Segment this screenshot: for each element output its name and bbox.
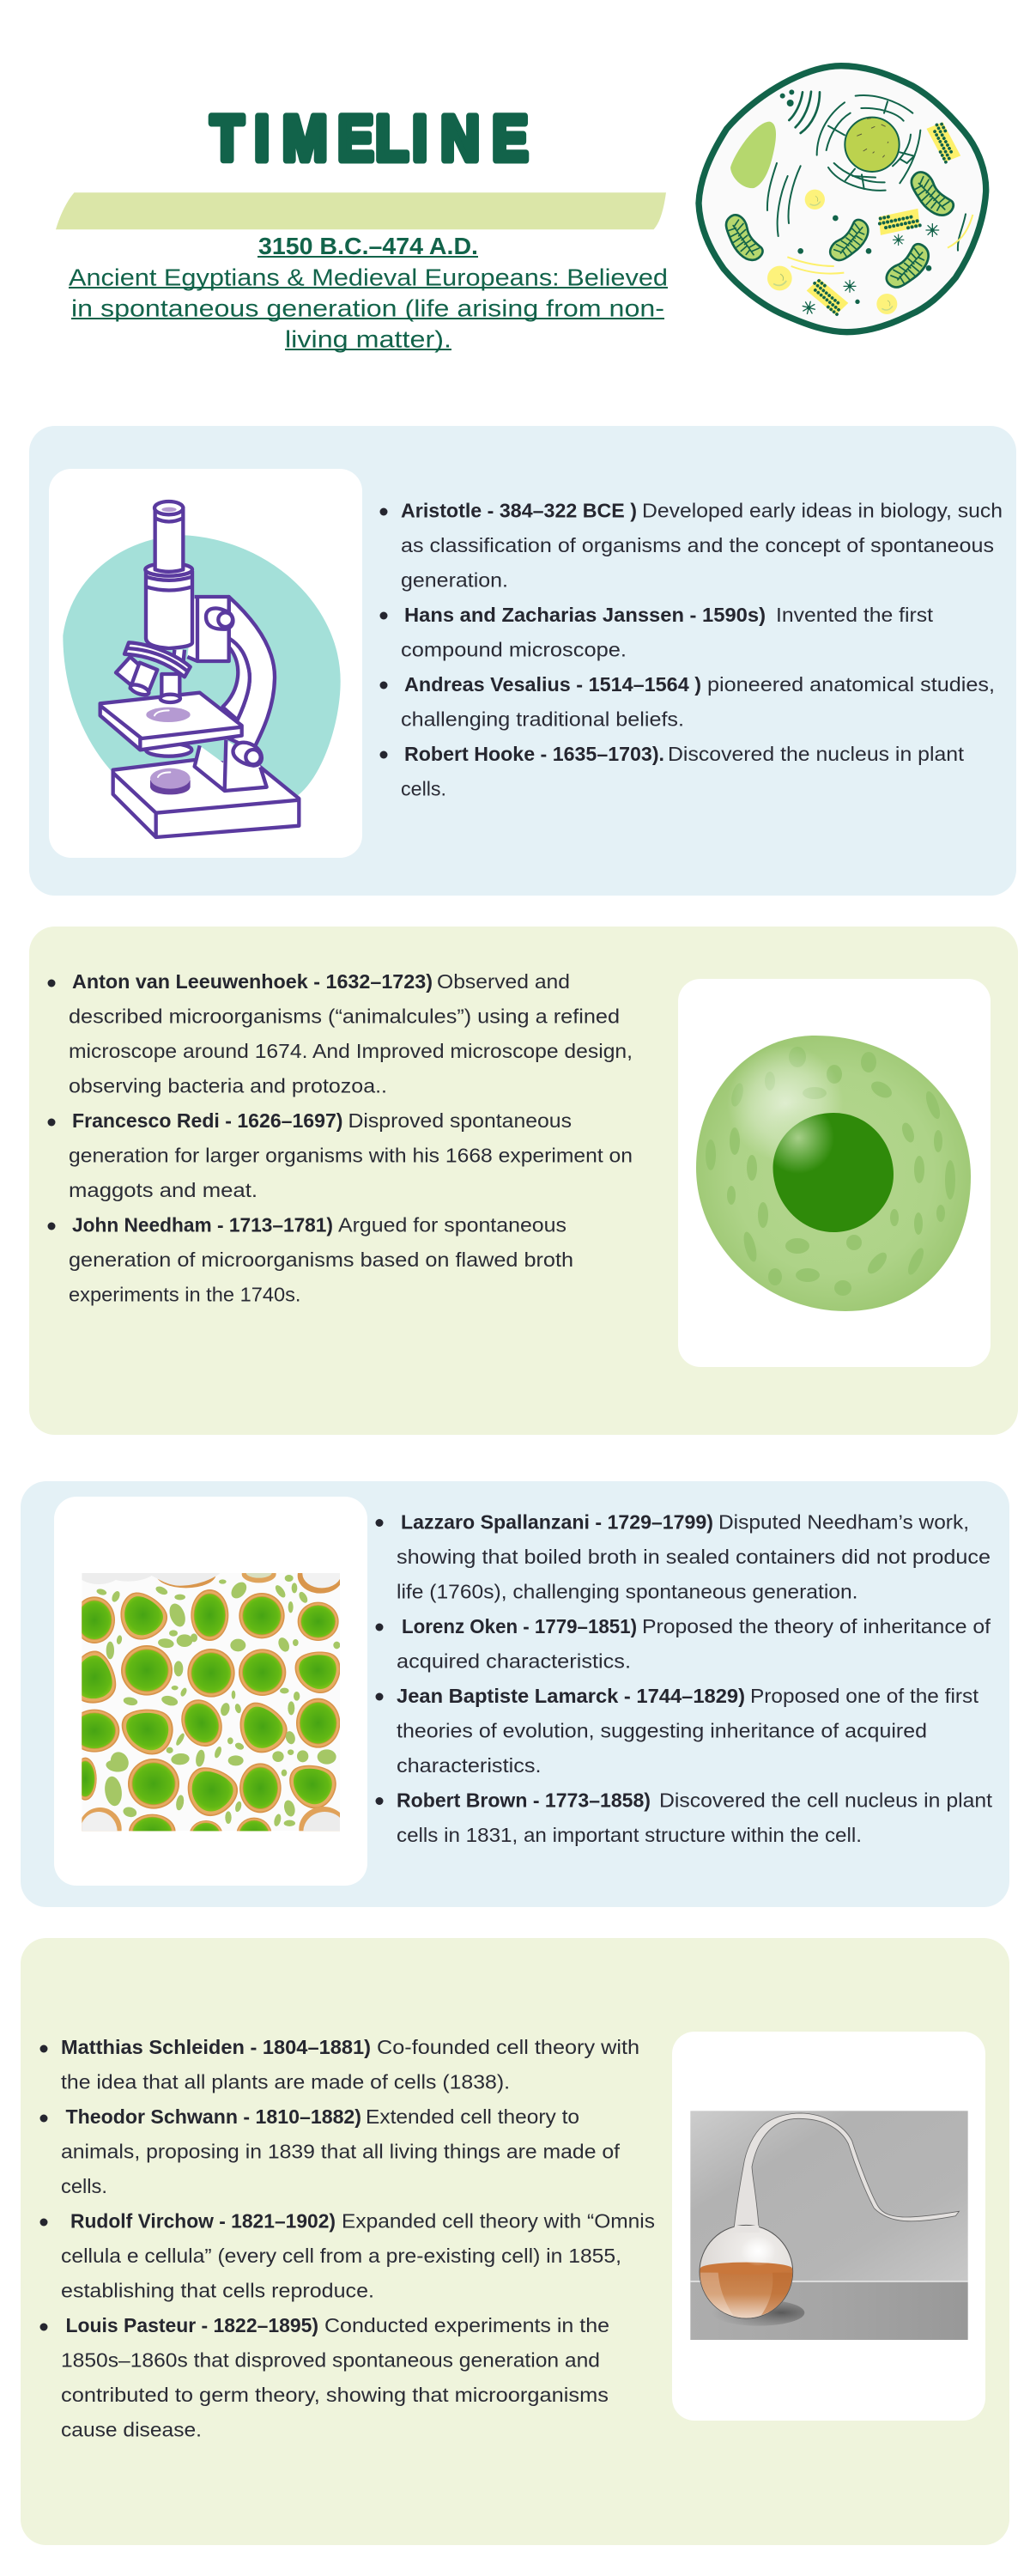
- icon: plant cell diagram: [699, 66, 986, 332]
- text block: cell theory founders: Matthias Schleiden - 1804–1881): [61, 2036, 371, 2058]
- text block: cell theory founders: cells.: [61, 2175, 107, 2197]
- text block: early scientists: [379, 500, 1003, 800]
- text block: inheritance theories: Discovered the cell nucleus in plant: [659, 1789, 992, 1812]
- text block: inheritance theories: [376, 1511, 992, 1846]
- image card: swan-neck flask: [672, 2032, 985, 2421]
- text block: cell theory founders: animals, proposing in 1839 that all living things are made of: [61, 2140, 620, 2162]
- image card: green cell: [678, 979, 991, 1367]
- text block: early scientists: Invented the first: [776, 604, 933, 626]
- text block: microscopists and spontaneous generation: generation of microorganisms based on flawed broth: [69, 1249, 573, 1271]
- illustration: plant cell pattern: [82, 1573, 340, 1831]
- text block: early scientists: Andreas Vesalius - 1514–1564 ): [404, 673, 701, 696]
- text block: microscopists and spontaneous generation: generation for larger organisms with his 1668 experiment on: [69, 1144, 633, 1166]
- intro text block: Ancient Egyptians & Medieval Europeans: Believed: [69, 264, 668, 290]
- intro text block: in spontaneous generation (life arising from non-: [71, 295, 664, 321]
- text block: early scientists: challenging traditional beliefs.: [401, 708, 684, 730]
- text block: inheritance theories: Jean Baptiste Lamarck - 1744–1829): [397, 1685, 745, 1707]
- text block: cell theory founders: Expanded cell theory with “Omnis: [342, 2210, 655, 2233]
- text block: microscopists and spontaneous generation: Anton van Leeuwenhoek - 1632–1723): [72, 970, 433, 993]
- text block: inheritance theories: life (1760s), challenging spontaneous generation.: [397, 1580, 858, 1602]
- text block: cell theory founders: Co-founded cell theory with: [377, 2036, 639, 2058]
- text block: cell theory founders: [39, 2036, 655, 2440]
- text block: microscopists and spontaneous generation: Disproved spontaneous: [348, 1109, 572, 1132]
- text block: inheritance theories: acquired characteristics.: [397, 1650, 631, 1673]
- text block: cell theory founders: contributed to germ theory, showing that microorganisms: [61, 2384, 609, 2406]
- text block: inheritance theories: Robert Brown - 1773–1858): [397, 1789, 651, 1812]
- text block: cell theory founders: cellula e cellula” (every cell from a pre-existing cell) in 1855,: [61, 2245, 621, 2267]
- text block: inheritance theories: theories of evolution, suggesting inheritance of acquired: [397, 1719, 927, 1741]
- text block: inheritance theories: Proposed the theory of inheritance of: [642, 1615, 991, 1637]
- text block: cell theory founders: Louis Pasteur - 1822–1895): [65, 2314, 318, 2336]
- text block: early scientists: Developed early ideas in biology, such: [642, 500, 1003, 522]
- text block: early scientists: pioneered anatomical studies,: [707, 673, 995, 696]
- text block: cell theory founders: cause disease.: [61, 2418, 202, 2440]
- text block: cell theory founders: Conducted experiments in the: [324, 2314, 609, 2336]
- text block: microscopists and spontaneous generation: observing bacteria and protozoa..: [69, 1075, 387, 1097]
- text block: early scientists: Discovered the nucleus in plant: [668, 743, 964, 765]
- text block: microscopists and spontaneous generation: John Needham - 1713–1781): [72, 1214, 333, 1236]
- panel: microorganisms: [29, 927, 1018, 1435]
- text block: early scientists: compound microscope.: [401, 639, 627, 661]
- text block: inheritance theories: Proposed one of the first: [750, 1685, 978, 1707]
- text block: inheritance theories: Disputed Needham’s work,: [718, 1511, 969, 1534]
- text block: cell theory founders: the idea that all plants are made of cells (1838).: [61, 2071, 510, 2093]
- text block: early scientists: Robert Hooke - 1635–1703).: [404, 743, 664, 765]
- text block: microscopists and spontaneous generation: described microorganisms (“animalcules”) using a refined: [69, 1005, 620, 1027]
- illustration: swan-neck flask: [690, 2111, 968, 2340]
- title: TIMELINE: [210, 103, 528, 174]
- banner band: [56, 192, 666, 229]
- text block: early scientists: generation.: [401, 568, 508, 591]
- text block: cell theory founders: 1850s–1860s that disproved spontaneous generation and: [61, 2349, 600, 2372]
- text block: early scientists: Aristotle - 384–322 BCE ): [401, 500, 637, 522]
- text block: inheritance theories: Lazzaro Spallanzani - 1729–1799): [401, 1511, 713, 1534]
- text block: early scientists: cells.: [401, 778, 446, 800]
- text block: inheritance theories: showing that boiled broth in sealed containers did not produce: [397, 1546, 991, 1568]
- text block: microscopists and spontaneous generation: maggots and meat.: [69, 1179, 258, 1201]
- text block: cell theory founders: Theodor Schwann - 1810–1882): [65, 2105, 361, 2128]
- intro text block: living matter).: [285, 326, 451, 353]
- text block: inheritance theories: cells in 1831, an important structure within the cell.: [397, 1824, 862, 1846]
- text block: microscopists and spontaneous generation: microscope around 1674. And Improved microscope design,: [69, 1040, 633, 1062]
- text block: cell theory founders: Rudolf Virchow - 1821–1902): [70, 2210, 336, 2233]
- text block: inheritance theories: Lorenz Oken - 1779–1851): [402, 1615, 637, 1637]
- intro text block: [69, 233, 668, 353]
- text block: cell theory founders: establishing that cells reproduce.: [61, 2279, 374, 2301]
- text block: inheritance theories: characteristics.: [397, 1754, 541, 1777]
- panel: inheritance and evolution: [21, 1481, 1009, 1907]
- text block: microscopists and spontaneous generation: [48, 970, 633, 1305]
- text block: microscopists and spontaneous generation: Observed and: [437, 970, 570, 993]
- text block: early scientists: as classification of organisms and the concept of spontaneous: [401, 534, 994, 556]
- illustration: green cell with nucleus: [696, 1036, 971, 1311]
- image card: cell tissue: [54, 1497, 367, 1886]
- intro text block: 3150 B.C.–474 A.D.: [258, 233, 478, 259]
- text block: microscopists and spontaneous generation: experiments in the 1740s.: [69, 1283, 300, 1305]
- panel: early biology: [29, 426, 1016, 896]
- image card: microscope: [49, 469, 362, 858]
- text block: early scientists: Hans and Zacharias Janssen - 1590s): [404, 604, 766, 626]
- text block: microscopists and spontaneous generation: Francesco Redi - 1626–1697): [72, 1109, 343, 1132]
- text block: cell theory founders: Extended cell theory to: [366, 2105, 579, 2128]
- text block: microscopists and spontaneous generation: Argued for spontaneous: [338, 1214, 566, 1236]
- icon: microscope: [63, 501, 341, 837]
- panel: cell theory: [21, 1938, 1009, 2545]
